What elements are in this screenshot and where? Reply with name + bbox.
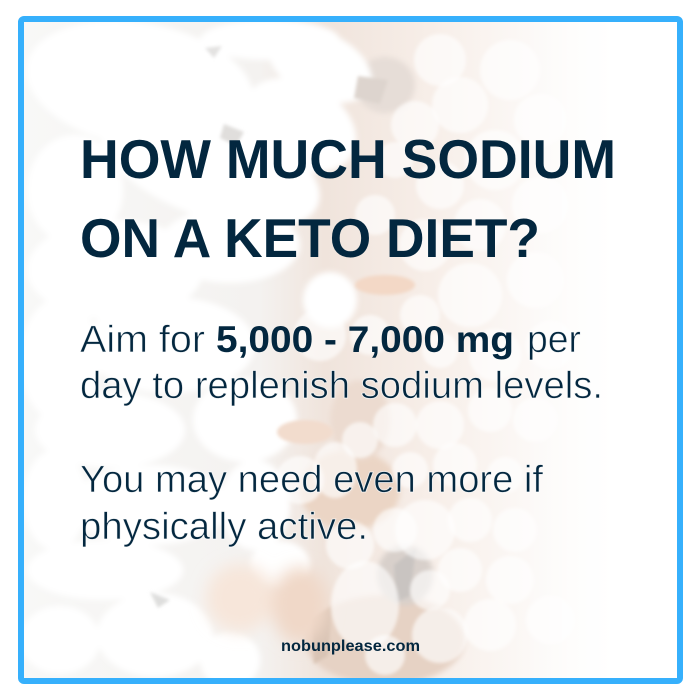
- panel: salt crystal background: [26, 22, 532, 678]
- text block: sodium target: 5,000 - 7,000 mg: [216, 319, 514, 360]
- text block: sodium target: per: [527, 319, 581, 361]
- text block: active note: [80, 459, 543, 548]
- text block: sodium target: [80, 319, 603, 407]
- text block: active note: You may need even more if: [80, 459, 543, 501]
- title: ON A KETO DIET?: [80, 207, 540, 269]
- text block: sodium target: Aim for: [80, 319, 205, 361]
- text block: sodium target: day to replenish sodium levels.: [80, 365, 603, 407]
- title: HOW MUCH SODIUM: [80, 128, 616, 190]
- text block: active note: physically active.: [80, 506, 368, 548]
- title: [80, 128, 616, 269]
- footer: website: nobunplease.com: [281, 638, 420, 655]
